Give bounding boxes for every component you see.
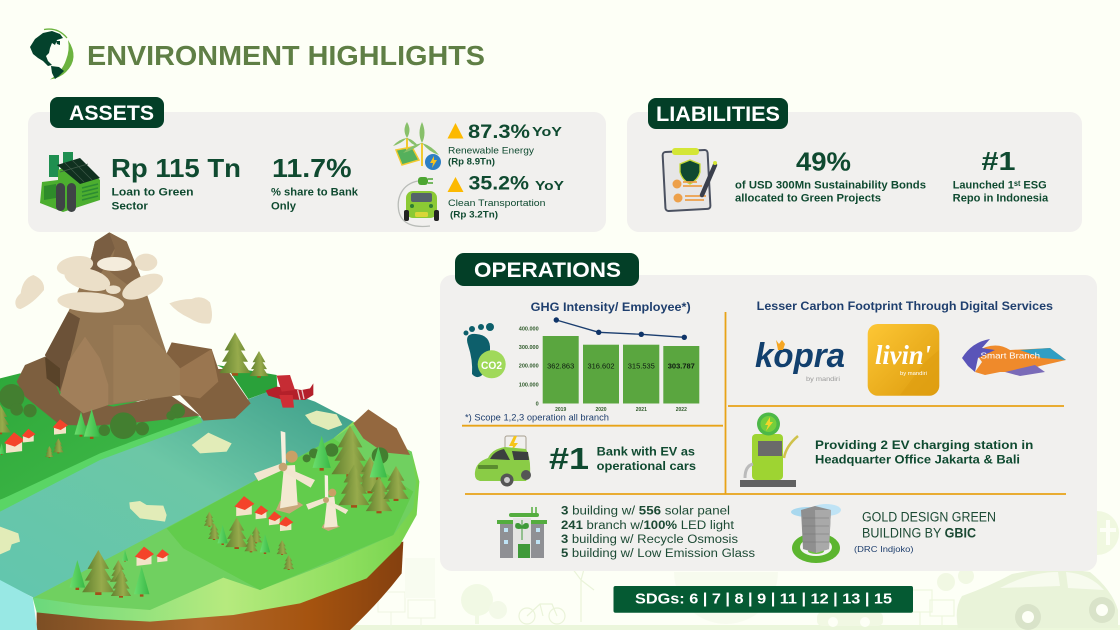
chart: GHG intensity per employee: GHG Intensity/ Employee*) <box>531 300 691 314</box>
icon: green certified tower <box>791 504 841 563</box>
chart: GHG intensity per employee: *) Scope 1,2,3 operation all branch <box>465 413 609 423</box>
stat: share to bank: % share to Bank <box>271 186 359 198</box>
text: EV charging stations: Providing 2 EV charging station in <box>815 438 1033 452</box>
chart: GHG intensity per employee: 362.863 <box>547 362 574 370</box>
houses <box>4 419 293 566</box>
stat: clean transportation: YoY <box>535 178 564 193</box>
faint plug icon <box>1075 511 1119 555</box>
ice floes <box>0 411 342 554</box>
text: building features: 3 building w/ 556 solar panel <box>561 506 730 518</box>
stat: renewable energy: YoY <box>532 124 562 139</box>
distant rocks <box>353 409 410 455</box>
chart: GHG intensity per employee: 315.535 <box>628 362 655 370</box>
text: building features <box>561 506 755 560</box>
panel: operations <box>440 253 1097 571</box>
title: ENVIRONMENT HIGHLIGHTS <box>87 40 485 71</box>
chart: GHG intensity per employee <box>465 300 699 423</box>
heading: digital services: Lesser Carbon Footprint Through Digital Services <box>757 301 1053 313</box>
logo: kopra: kopra <box>755 337 845 375</box>
river <box>0 388 353 598</box>
windmills <box>254 431 348 531</box>
text: building features: 3 building w/ Recycle Osmosis <box>561 534 738 546</box>
heading: assets: ASSETS <box>69 102 154 125</box>
icon: green building <box>497 507 547 558</box>
heading: operations <box>455 253 639 286</box>
chart: GHG intensity per employee: 316.602 <box>587 362 615 370</box>
waterfall <box>0 578 37 630</box>
stat: renewable energy: (Rp 8.9Tn) <box>448 157 495 167</box>
stat: loan to green sector: Loan to Green <box>112 186 194 198</box>
trees <box>0 332 409 598</box>
stat: loan to green sector: Sector <box>112 200 149 212</box>
text: EV charging stations <box>815 438 1033 466</box>
panel: liabilities <box>627 98 1082 232</box>
text: gold design green building: BUILDING BY GBIC <box>862 526 976 541</box>
lower bank <box>33 425 416 610</box>
stat: first ESG repo: Launched 1ˢᵗ ESG <box>953 180 1047 192</box>
icon: clipboard checklist <box>663 148 717 211</box>
text: gold design green building: GOLD DESIGN GREEN <box>862 510 996 525</box>
stat: loan to green sector <box>111 153 241 212</box>
logo: smart branch: Smart Branch <box>980 351 1040 361</box>
logo: livin <box>868 324 939 396</box>
stat: first ESG repo: #1 <box>982 146 1016 176</box>
island rim <box>33 422 419 622</box>
faint eco background illustration <box>350 558 1120 630</box>
red airplane <box>266 375 313 408</box>
illustration: floating low-poly island <box>0 232 419 630</box>
stat: first ESG repo <box>953 146 1049 204</box>
icon: wind turbines and solar panel <box>393 122 441 170</box>
icon: globe with leaf <box>30 29 74 80</box>
icon: CO2 footprint: CO2 <box>481 360 502 372</box>
faint electric car <box>957 569 1118 630</box>
chart: GHG intensity per employee: 0 <box>536 401 539 407</box>
stat: share to bank: Only <box>271 200 297 212</box>
icon: green EV car <box>475 436 531 486</box>
logo: smart branch <box>962 339 1066 376</box>
chart: GHG intensity per employee: 200.000 <box>519 364 539 370</box>
stat: sustainability bonds: of USD 300Mn Sustainability Bonds <box>735 180 926 192</box>
SDGs badge: SDGs: 6 | 7 | 8 | 9 | 11 | 12 | 13 | 15 <box>635 590 892 608</box>
panel: assets <box>28 97 606 232</box>
stat: EV operational cars: #1 <box>549 441 589 476</box>
text: building features: 241 branch w/ 100% LED light <box>561 520 735 532</box>
icon: electric car with plug <box>398 177 439 226</box>
logo: kopra: by mandiri <box>806 377 840 383</box>
clouds <box>15 253 212 324</box>
heading: liabilities <box>648 98 788 129</box>
text: gold design green building: (DRC Indjoko) <box>854 544 914 554</box>
logo: livin: livin' <box>875 340 931 370</box>
upper left bank <box>0 373 200 500</box>
chart: GHG intensity per employee: 303.787 <box>668 362 695 370</box>
stat: sustainability bonds <box>735 146 926 204</box>
stat: renewable energy: 87.3% <box>468 122 530 143</box>
stat: renewable energy: Renewable Energy <box>448 145 534 156</box>
stat: loan to green sector: Rp 115 Tn <box>111 153 241 183</box>
icon: green factory <box>40 152 100 212</box>
SDGs badge <box>614 586 913 613</box>
stat: renewable energy <box>448 122 562 167</box>
stat: sustainability bonds: allocated to Green Projects <box>735 192 881 204</box>
chart: GHG intensity per employee: 400.000 <box>519 326 539 332</box>
logo: livin: by mandiri <box>900 371 927 377</box>
stat: sustainability bonds: 49% <box>796 146 851 176</box>
stat: clean transportation: 35.2% <box>468 173 529 194</box>
stat: clean transportation: (Rp 3.2Tn) <box>450 209 498 219</box>
bushes <box>0 384 388 464</box>
stat: first ESG repo: Repo in Indonesia <box>953 192 1049 204</box>
text: gold design green building <box>854 510 996 554</box>
text: building features: 5 building w/ Low Emission Glass <box>561 548 755 560</box>
stat: EV operational cars: operational cars <box>597 459 696 473</box>
icon: EV charging station <box>740 412 798 487</box>
chart: GHG intensity per employee: 300.000 <box>519 345 539 351</box>
stat: EV operational cars <box>549 441 696 476</box>
icon: CO2 footprint <box>464 323 506 378</box>
stat: EV operational cars: Bank with EV as <box>597 445 695 459</box>
chart: GHG intensity per employee: 2019 <box>555 407 566 413</box>
heading: liabilities: LIABILITIES <box>656 103 780 126</box>
stat: share to bank <box>271 153 359 212</box>
text: EV charging stations: Headquarter Office Jakarta & Bali <box>815 452 1020 466</box>
chart: GHG intensity per employee: 2020 <box>595 407 607 413</box>
heading: operations: OPERATIONS <box>474 259 621 282</box>
chart: GHG intensity per employee: 2021 <box>636 407 647 413</box>
chart: GHG intensity per employee: 2022 <box>676 407 687 413</box>
stat: clean transportation: Clean Transportation <box>448 198 546 209</box>
island soil base <box>37 542 403 630</box>
stat: share to bank: 11.7% <box>272 153 352 183</box>
stat: clean transportation <box>448 173 564 219</box>
mountain <box>17 232 251 426</box>
chart: GHG intensity per employee: 100.000 <box>519 382 539 388</box>
heading: assets <box>50 97 164 128</box>
